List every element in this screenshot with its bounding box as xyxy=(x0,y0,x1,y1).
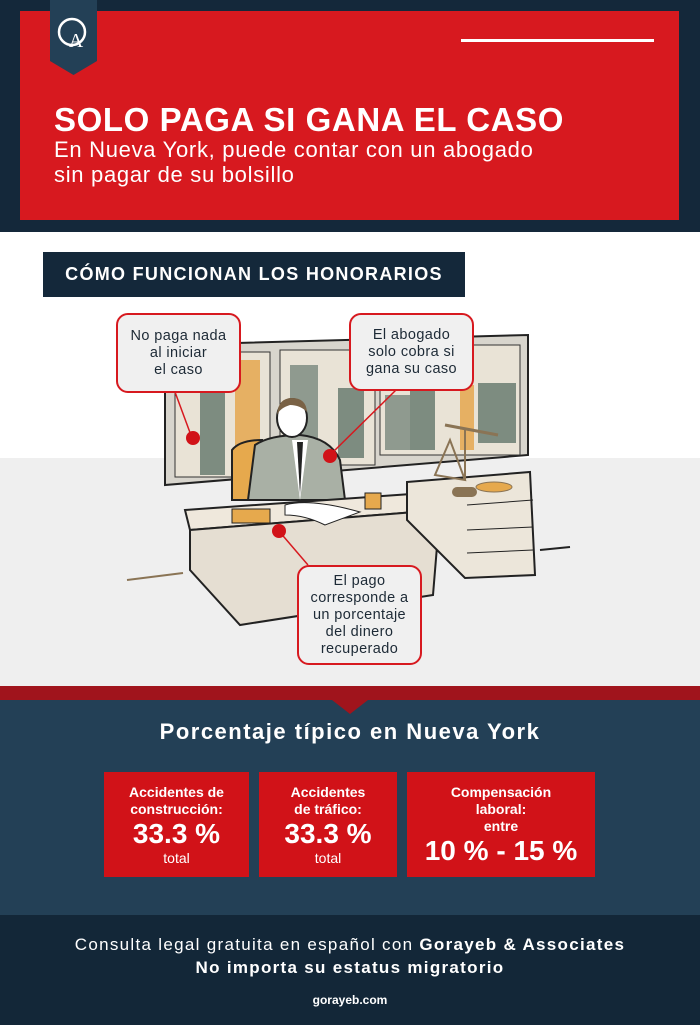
stat: workers comp: 10 % - 15 % xyxy=(425,835,577,866)
stat: traffic xyxy=(259,772,397,877)
callout: no upfront payment: al iniciar xyxy=(150,344,207,360)
stat: construction: total xyxy=(163,850,190,866)
stat: workers comp xyxy=(407,772,595,877)
stat: construction: Accidentes de xyxy=(129,784,224,800)
stat: workers comp: Compensación xyxy=(451,784,551,800)
subtitle xyxy=(54,137,534,187)
stat: workers comp: laboral: xyxy=(476,801,526,817)
callout: percentage of recovered money: recuperado xyxy=(321,640,398,656)
callout: percentage of recovered money: corresponde a xyxy=(311,590,408,606)
subtitle: sin pagar de su bolsillo xyxy=(54,162,295,187)
section heading xyxy=(43,252,465,297)
subtitle: En Nueva York, puede contar con un abogado xyxy=(54,137,534,162)
stat: construction xyxy=(104,772,249,877)
callout: only charges if win: solo cobra si xyxy=(368,344,455,360)
stat: traffic: total xyxy=(315,850,341,866)
callout: percentage of recovered money xyxy=(297,565,422,665)
callout: percentage of recovered money: El pago xyxy=(334,572,385,588)
header red panel xyxy=(20,11,679,220)
stats heading: Porcentaje típico en Nueva York xyxy=(160,719,540,744)
stat: traffic: de tráfico: xyxy=(294,801,362,817)
desk xyxy=(127,492,440,625)
website: gorayeb.com xyxy=(313,993,387,1007)
header frame xyxy=(0,0,700,232)
pointer lines and dots xyxy=(175,390,396,565)
stats panel xyxy=(0,714,700,915)
cabinet and scales xyxy=(407,425,570,578)
footer CTA text: Consulta legal gratuita en español con Gorayeb & Associates xyxy=(75,935,625,954)
decorative white line xyxy=(461,39,654,42)
stat: construction: construcción: xyxy=(130,801,223,817)
stat: construction: 33.3 % xyxy=(133,818,220,849)
footer CTA text xyxy=(75,935,625,977)
callout: only charges if win: gana su caso xyxy=(366,360,457,376)
section heading: CÓMO FUNCIONAN LOS HONORARIOS xyxy=(65,264,443,284)
title: SOLO PAGA SI GANA EL CASO xyxy=(54,101,564,138)
logo badge xyxy=(50,0,97,75)
callout: percentage of recovered money: un porcentaje xyxy=(313,606,406,622)
callout: only charges if win: El abogado xyxy=(373,326,450,342)
footer CTA text: No importa su estatus migratorio xyxy=(196,958,504,977)
illustration: lawyer office xyxy=(126,334,570,626)
stat: workers comp: entre xyxy=(484,818,518,834)
callout: no upfront payment: el caso xyxy=(154,362,203,378)
callout: only charges if win xyxy=(349,313,474,391)
lawyer xyxy=(232,398,345,500)
windows xyxy=(165,335,528,485)
stat: traffic: Accidentes xyxy=(291,784,365,800)
footer xyxy=(0,915,700,1025)
stat: traffic: 33.3 % xyxy=(284,818,372,849)
logo badge: A xyxy=(69,30,84,52)
red band with arrow xyxy=(0,686,700,714)
callout: no upfront payment: No paga nada xyxy=(131,328,226,344)
floor background xyxy=(0,458,700,686)
callout: percentage of recovered money: del dinero xyxy=(326,624,393,640)
callout: no upfront payment xyxy=(116,313,241,393)
